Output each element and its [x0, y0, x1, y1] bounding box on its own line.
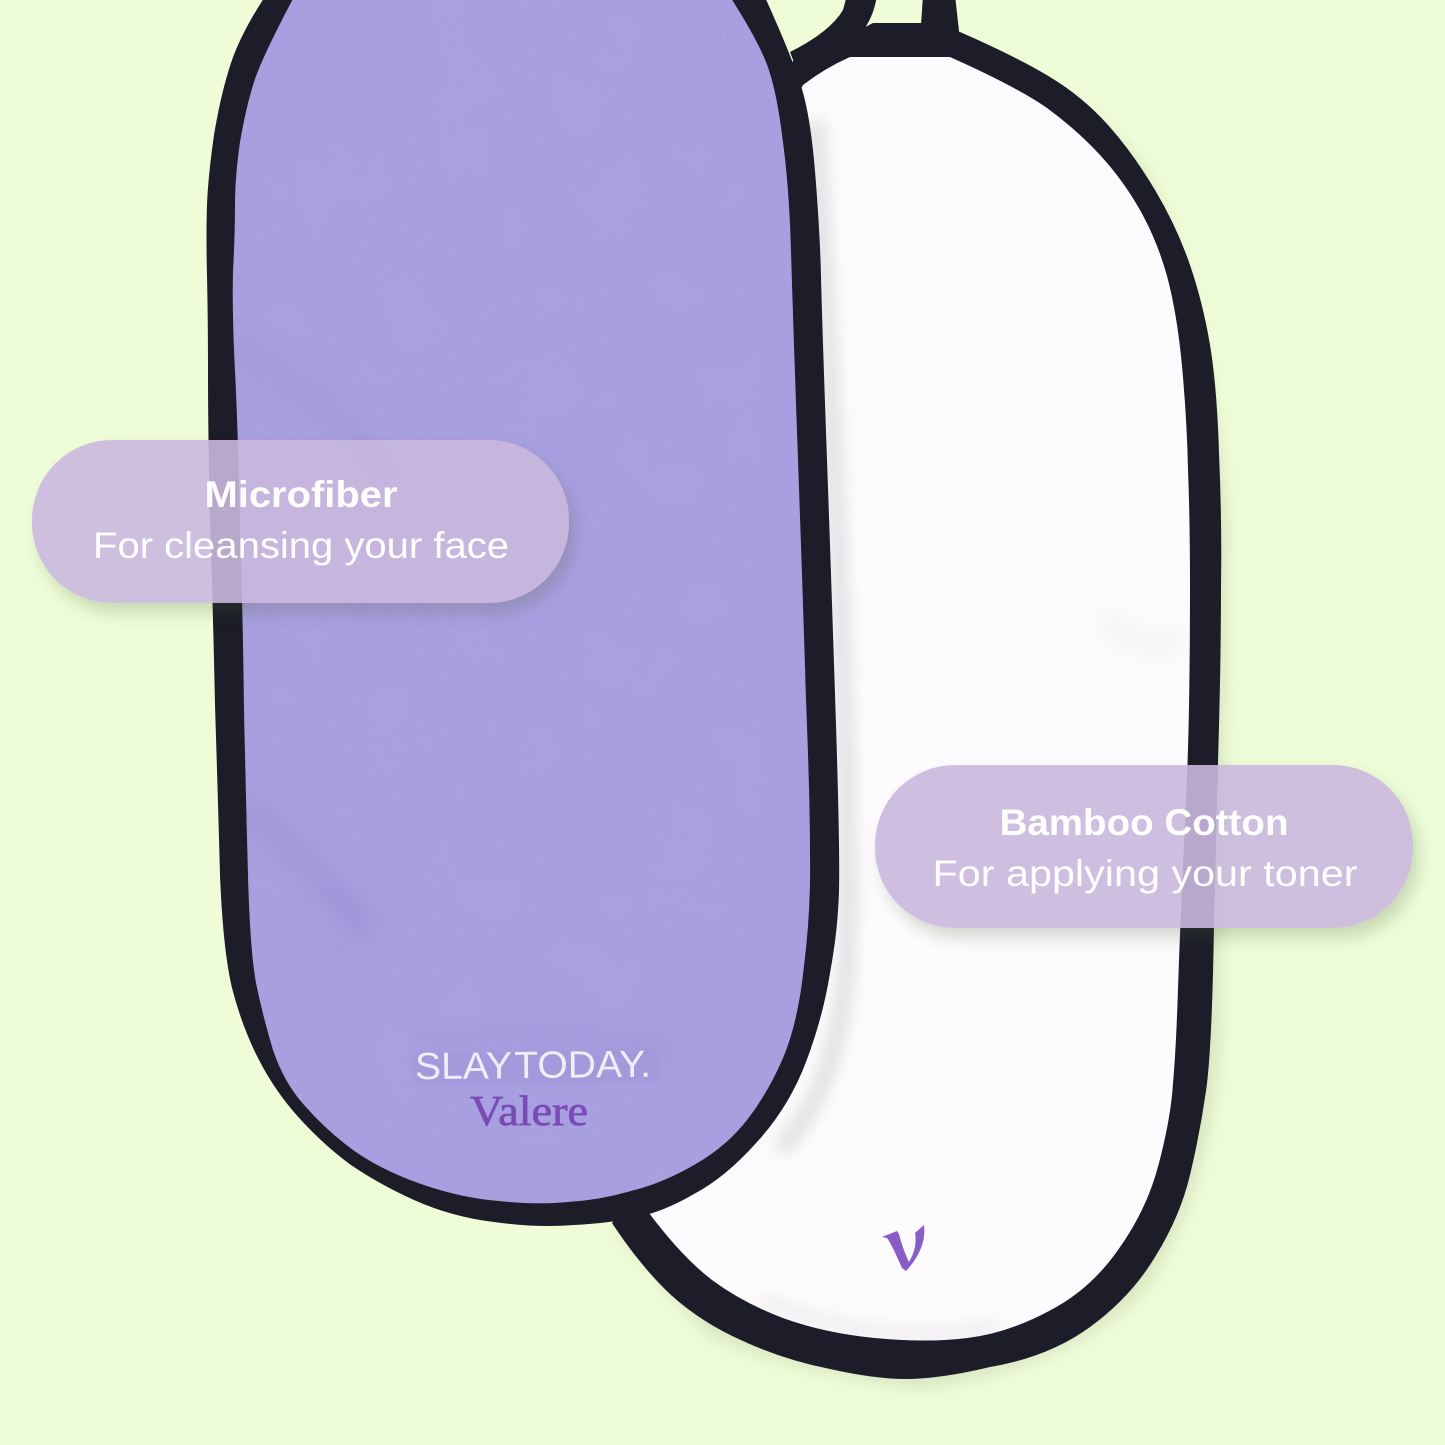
callout title: Microfiber	[204, 474, 398, 515]
white cotton face	[640, 40, 1210, 1360]
embroidery: Valere: Valere	[470, 1089, 588, 1135]
black binding	[206, 0, 839, 1226]
embroidery: SLAY TODAY: SLAY TODAY.	[415, 1044, 651, 1088]
callout pill	[32, 440, 569, 603]
callout shadow	[881, 775, 1419, 938]
shadow cast by front towel	[780, 120, 848, 1150]
soft fold shading	[238, 305, 793, 1200]
callout shadow	[38, 450, 575, 613]
callout description: For cleansing your face	[93, 525, 509, 566]
towel shadow	[616, 45, 1228, 1389]
callout: microfiber	[32, 440, 575, 613]
embroidered V logo	[882, 1225, 924, 1271]
callout title: Bamboo Cotton	[1000, 802, 1288, 843]
callout description: For applying your toner	[932, 853, 1358, 894]
callout pill	[875, 765, 1413, 928]
towel: microfiber (purple, front)	[206, 0, 839, 1226]
towel: bamboo cotton (white, back)	[612, 0, 1228, 1389]
black binding	[612, 23, 1221, 1379]
hanging loop	[790, 0, 960, 85]
callout: bamboo cotton	[875, 765, 1419, 938]
purple microfiber face	[225, 0, 825, 1220]
